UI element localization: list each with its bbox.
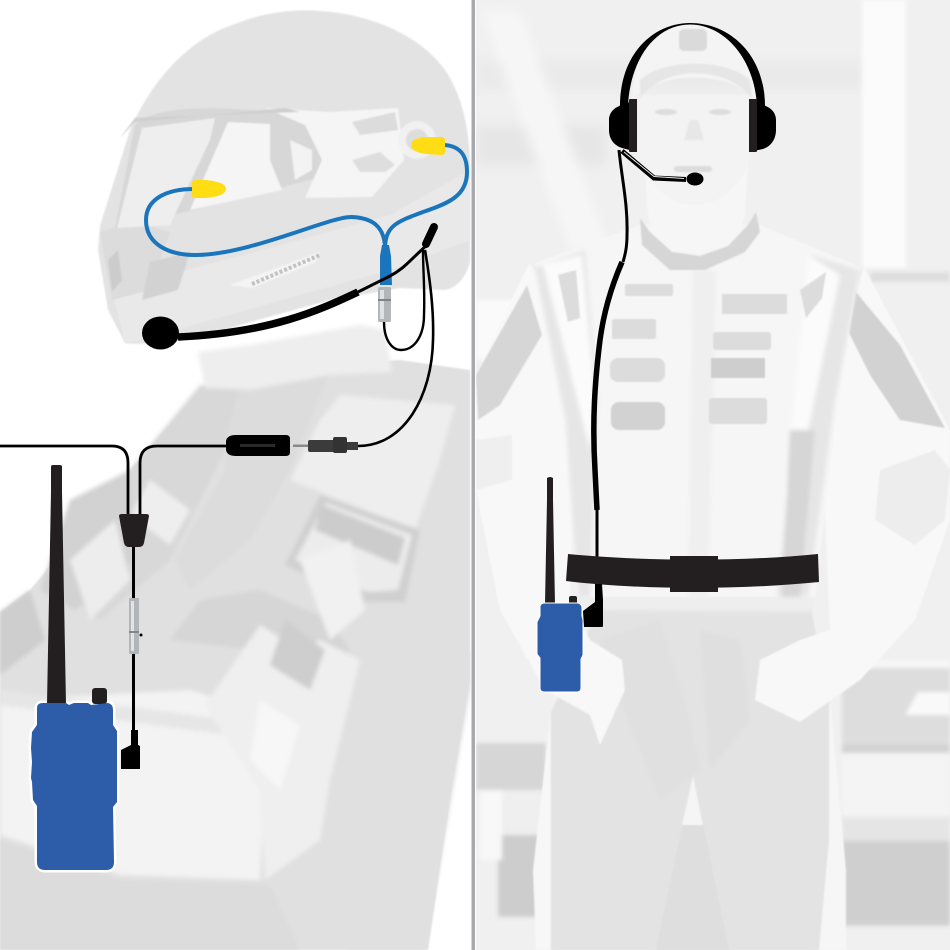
icon: small blue radio — [537, 477, 583, 692]
belt — [566, 554, 819, 592]
lower cable — [132, 547, 135, 732]
headband — [620, 23, 765, 106]
garage background — [470, 0, 950, 950]
driver neck collar — [198, 325, 392, 390]
coiled cable — [594, 262, 622, 510]
panel: right standing crew member photo — [470, 0, 950, 950]
boom arm — [622, 151, 686, 180]
panel: left driver in helmet photo — [0, 10, 470, 950]
foam microphone — [142, 316, 179, 350]
crew member face and cap — [634, 29, 752, 172]
radio blue body — [31, 703, 117, 870]
metal connector upper — [378, 287, 391, 322]
left ear cup — [609, 99, 637, 152]
crew member arms and hands — [476, 263, 950, 745]
thin boom section — [358, 246, 426, 292]
metal inline connector — [129, 598, 142, 654]
small radio body — [537, 603, 583, 692]
branch to inline connector — [140, 446, 228, 516]
earpiece cable: blue Y harness — [146, 137, 467, 285]
microphone boom and cables near helmet — [142, 227, 434, 446]
left yellow earbud — [192, 180, 226, 198]
small radio plug — [583, 584, 603, 627]
right ear pad — [749, 99, 757, 152]
outgoing cable to left edge — [0, 446, 128, 516]
thin cable from ear cup — [619, 150, 627, 262]
radio antenna — [47, 465, 66, 704]
radio knob — [92, 688, 107, 704]
crew member legs — [533, 590, 846, 950]
suit collar — [640, 212, 760, 270]
Y splitter — [119, 514, 149, 547]
right ear cup — [749, 99, 776, 152]
thick boom section — [178, 292, 358, 337]
long cable down to jack — [358, 250, 433, 446]
headset microphone — [686, 172, 704, 186]
small radio antenna — [545, 477, 555, 604]
straight cable to belt — [596, 510, 598, 560]
left ear pad — [629, 99, 637, 152]
radio plug — [121, 730, 140, 769]
blue cable — [146, 145, 467, 255]
right yellow earbud — [411, 137, 445, 155]
gap between legs — [656, 775, 729, 950]
headset on crew member — [537, 23, 819, 692]
small radio knob — [569, 596, 577, 604]
black inline connector — [226, 435, 290, 456]
radio white outline — [31, 703, 117, 870]
coiled loop cable — [384, 250, 424, 350]
helmet — [98, 10, 470, 344]
driver suit body — [0, 360, 470, 950]
boom end connector — [426, 227, 434, 244]
center divider — [472, 0, 475, 950]
helmet side lettering — [252, 255, 320, 284]
crew member suit torso — [536, 258, 856, 598]
suit sponsor patches — [558, 270, 826, 430]
icon: large blue radio — [31, 465, 117, 870]
blue connector — [380, 245, 392, 285]
3.5 mm jack plug — [293, 437, 358, 453]
cables to radio, left panel — [0, 435, 358, 769]
